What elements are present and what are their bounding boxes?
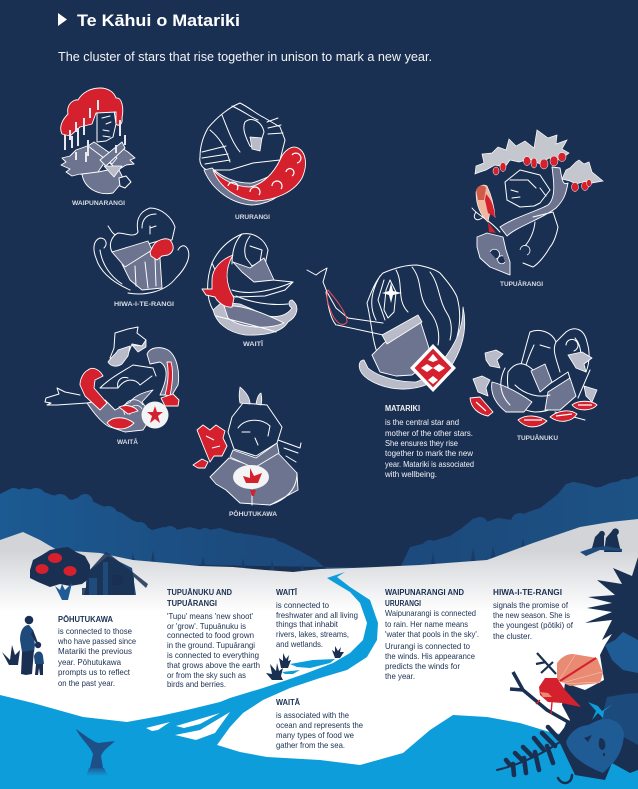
figure label: Waitā: WAITĀ — [117, 439, 139, 446]
text block: Tupuānuku and Tupuārangi: that grows above the earth — [167, 660, 260, 670]
icon: fantail bird on branch — [510, 653, 603, 723]
text block: Waipunarangi and Ururangi: Ururangi is connected to — [385, 641, 470, 651]
text block: Waipunarangi and Ururangi: the winds. His appearance — [385, 651, 475, 661]
icon: flax near lake — [266, 653, 291, 680]
text block: Hiwa-i-te-rangi — [493, 587, 574, 641]
figure label: Tupuārangi: TUPUĀRANGI — [500, 281, 543, 288]
subtitle: The cluster of stars that rise together in unison to mark a new year. — [58, 50, 432, 64]
text block: Tupuānuku and Tupuārangi: is connected to everything — [167, 650, 259, 660]
text block: Waipunarangi and Ururangi: URURANGI — [385, 598, 421, 608]
text block: Tupuānuku and Tupuārangi: TUPUĀNUKU AND — [167, 587, 232, 597]
figure: Waipunarangi — [61, 88, 135, 194]
figure: Tupuārangi — [472, 130, 603, 275]
figure: Waitā — [45, 327, 179, 432]
figure label: Waipunarangi: WAIPUNARANGI — [72, 201, 125, 207]
river lagoon — [282, 659, 335, 674]
figure: Matariki — [307, 265, 465, 392]
text block: Waitī: and wetlands. — [276, 639, 323, 649]
foliage: dark palm and leaves on right edge — [557, 557, 638, 780]
text block: Tupuānuku and Tupuārangi: or from the sky such as — [167, 670, 247, 680]
text block: Pōhutukawa — [57, 614, 136, 688]
text block: Waitā: ocean and represents the — [276, 720, 363, 730]
figure label: Ururangi: URURANGI — [235, 215, 270, 221]
text block: Hiwa-i-te-rangi: the cluster. — [493, 631, 532, 641]
text block: Tupuānuku and Tupuārangi: birds and berries. — [167, 679, 226, 689]
text block: Waipunarangi and Ururangi: 'water that pools in the sky'. — [385, 629, 479, 639]
text block: Pōhutukawa: year. Pōhutukawa — [58, 657, 121, 667]
text block: Waipunarangi and Ururangi: to rain. Her name means — [385, 619, 469, 629]
text block: Waipunarangi and Ururangi — [385, 587, 479, 681]
icon: couple on the hill — [580, 528, 622, 556]
landscape: snowy ground and white land — [0, 519, 638, 789]
text block: Waitī: things that inhabit — [276, 619, 339, 629]
figure: Pōhutukawa — [193, 387, 301, 505]
text block: Waitī: WAITĪ — [276, 587, 298, 597]
icon: wharenui meeting house — [82, 552, 148, 595]
text block: Waitā: gather from the sea. — [276, 740, 345, 750]
text block: Tupuānuku and Tupuārangi: TUPUĀRANGI — [167, 598, 217, 608]
river islands — [146, 712, 230, 740]
text block: Pōhutukawa: on the past year. — [58, 678, 115, 688]
text block: Pōhutukawa: who have passed since — [57, 636, 136, 646]
Matariki description — [384, 403, 474, 479]
text block: Pōhutukawa: Matariki the previous — [58, 646, 133, 656]
icon: pōhutukawa tree — [30, 547, 90, 600]
text block: Waitā: is associated with the — [276, 710, 349, 720]
text block: Tupuānuku and Tupuārangi: or 'grow'. Tupuānuku is — [167, 621, 247, 631]
text block: Pōhutukawa: prompts us to reflect — [58, 667, 131, 677]
text block: Pōhutukawa: is connected to those — [58, 626, 132, 636]
figure: Waitī — [202, 234, 297, 335]
text block: Waitī: freshwater and all living — [276, 610, 358, 620]
foliage: fern — [497, 723, 572, 783]
text block: Waitī: rivers, lakes, streams, — [276, 629, 349, 639]
Matariki description: with wellbeing. — [384, 469, 437, 479]
icon: father and child — [2, 616, 44, 675]
text block: Tupuānuku and Tupuārangi: in the ground. Tupuārangi — [167, 640, 255, 650]
text block: Waipunarangi and Ururangi: WAIPUNARANGI AND — [385, 587, 464, 597]
text block: Waipunarangi and Ururangi: Waipunarangi is connected — [385, 608, 476, 618]
text block: Hiwa-i-te-rangi: the new season. She is — [493, 610, 571, 620]
figure label: Hiwa-i-te-rangi: HIWA-I-TE-RANGI — [114, 302, 174, 308]
foliage: blue leaves — [566, 632, 638, 773]
Matariki description: She ensures they rise — [385, 438, 458, 448]
text block: Tupuānuku and Tupuārangi: connected to food grown — [167, 630, 254, 640]
figure label: Pōhutukawa: PŌHUTUKAWA — [229, 511, 278, 518]
icon: blue flower — [588, 702, 613, 720]
text block: Hiwa-i-te-rangi: the youngest (pōtiki) of — [493, 620, 574, 630]
Matariki description: is the central star and — [385, 417, 459, 427]
landscape: tree trunks — [130, 538, 526, 574]
text block: Waitā — [276, 697, 363, 750]
ocean and river — [0, 572, 638, 789]
text block: Waitā: many types of food we — [276, 730, 354, 740]
figure label: Waitī: WAITĪ — [243, 341, 263, 348]
landscape: forest treeline — [0, 476, 638, 572]
text block: Tupuānuku and Tupuārangi — [167, 587, 260, 689]
icon: flax near river bend — [332, 646, 344, 658]
Matariki description: MATARIKI — [385, 403, 420, 413]
text block: Tupuānuku and Tupuārangi: 'Tupu' means 'new shoot' — [167, 611, 253, 621]
Matariki description: together to mark the new — [385, 448, 474, 458]
icon: whale tail — [76, 729, 115, 776]
figure label: Tupuānuku: TUPUĀNUKU — [517, 435, 558, 442]
Matariki description: year. Matariki is associated — [385, 459, 474, 469]
text block: Waitī: is connected to — [276, 600, 329, 610]
text block: Pōhutukawa: PŌHUTUKAWA — [58, 614, 113, 624]
figure: Tupuānuku — [470, 329, 597, 427]
text block: Waipunarangi and Ururangi: predicts the winds for — [385, 661, 460, 671]
text block: Hiwa-i-te-rangi: HIWA-I-TE-RANGI — [493, 587, 562, 597]
title: Te Kāhui o Matariki — [77, 12, 240, 30]
text block: Hiwa-i-te-rangi: signals the promise of — [493, 600, 569, 610]
figure: Ururangi — [200, 103, 305, 205]
figure: Hiwa-i-te-rangi — [94, 208, 189, 294]
text block: Waitā: WAITĀ — [276, 697, 300, 707]
text block: Waipunarangi and Ururangi: the year. — [385, 671, 415, 681]
Matariki description: mother of the other stars. — [385, 428, 473, 438]
text block: Waitī — [276, 587, 358, 649]
foliage: heart leaf marks — [584, 735, 605, 756]
